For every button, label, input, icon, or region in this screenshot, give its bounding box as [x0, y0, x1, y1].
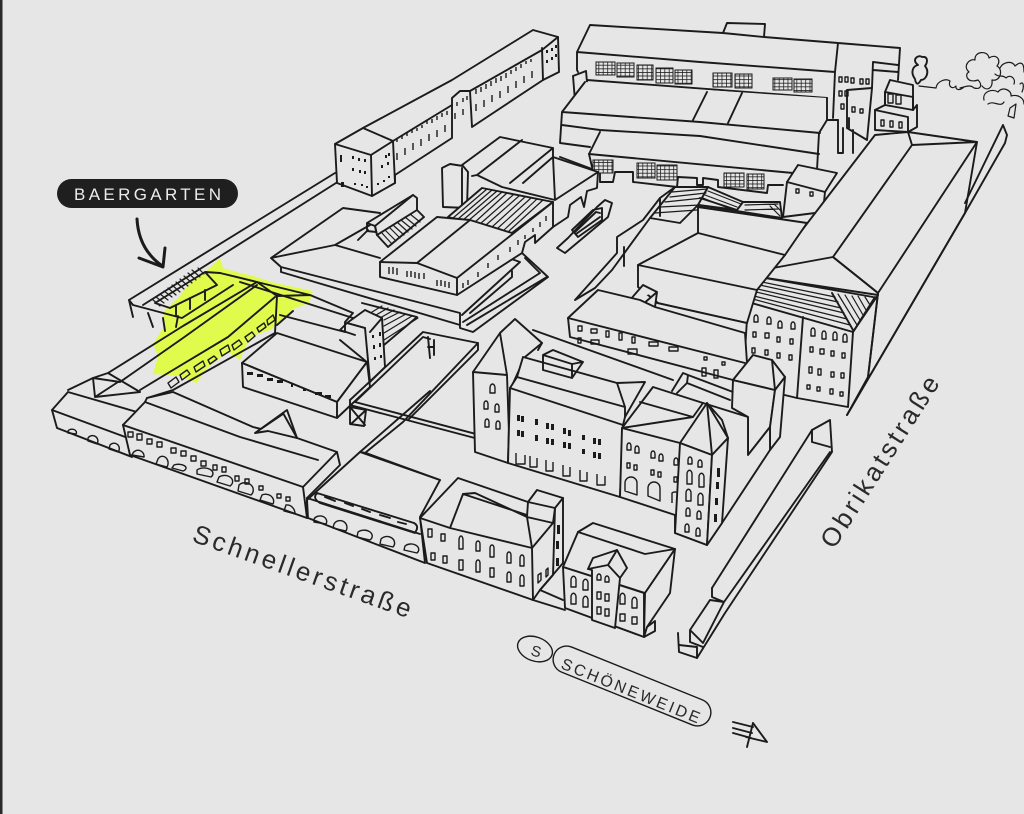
label: Schnellerstraße: Schnellerstraße [189, 518, 416, 624]
street side strip [678, 420, 832, 658]
building: front row town house [420, 478, 563, 600]
courtyard pool [557, 200, 612, 253]
building: front row canopy block [307, 452, 440, 563]
building: front row corner pavilion [52, 373, 140, 457]
label: Baergarten [57, 179, 238, 208]
building: lower courtyard shed with windows [560, 154, 793, 193]
label: S-Bahn Schöneweide: SCHÖNEWEIDE [559, 655, 702, 727]
label: Obrikatstraße: Obrikatstraße [814, 370, 945, 553]
tower with trees behind it [875, 80, 917, 132]
building: middle sheds [560, 82, 838, 173]
building: front row long block [123, 392, 340, 518]
building: long right hall [773, 132, 977, 415]
fence by the hall [965, 125, 1007, 213]
building: corner block with striped roof [743, 277, 878, 407]
small cube on roof [630, 285, 657, 315]
building: central complex large hall [271, 200, 553, 332]
boundary wall lines [129, 173, 336, 305]
building: rear silo and upper halls [442, 137, 598, 227]
building: low factory next to baergarten [242, 333, 370, 418]
arrow to Baergarten [137, 219, 165, 267]
building: hall with gabled roof [380, 202, 553, 295]
striped annex [358, 195, 424, 247]
building: baergarten long shed and pergola [68, 268, 353, 398]
building: top factory hall [573, 23, 900, 153]
label: S-Bahn Schöneweide: S [529, 642, 543, 661]
building: right rear tower [732, 355, 785, 455]
building: small cube annex [783, 165, 837, 217]
roof strip with stripes [575, 187, 782, 300]
north arrow [733, 722, 767, 747]
building: front second block and corner tower [620, 387, 770, 545]
label: S-Bahn Schöneweide [514, 632, 715, 730]
label: Baergarten: BAERGARTEN [74, 185, 221, 204]
tower beside low factory [340, 310, 385, 382]
background edge stripe [0, 0, 2, 814]
building: central courtyard hall [638, 207, 807, 323]
yellow highlight [153, 258, 313, 383]
building: north-west long block [335, 30, 559, 196]
building: low front wing with windows [568, 290, 747, 380]
striped roof [448, 188, 553, 233]
building: front row small gabled house [533, 523, 675, 637]
trees [912, 53, 1024, 118]
building: rear connector behind front blocks [533, 330, 733, 400]
courtyard bridge frame and pipe [350, 332, 612, 473]
building: front central main block [473, 319, 645, 497]
striped roof behind tower [362, 303, 418, 345]
